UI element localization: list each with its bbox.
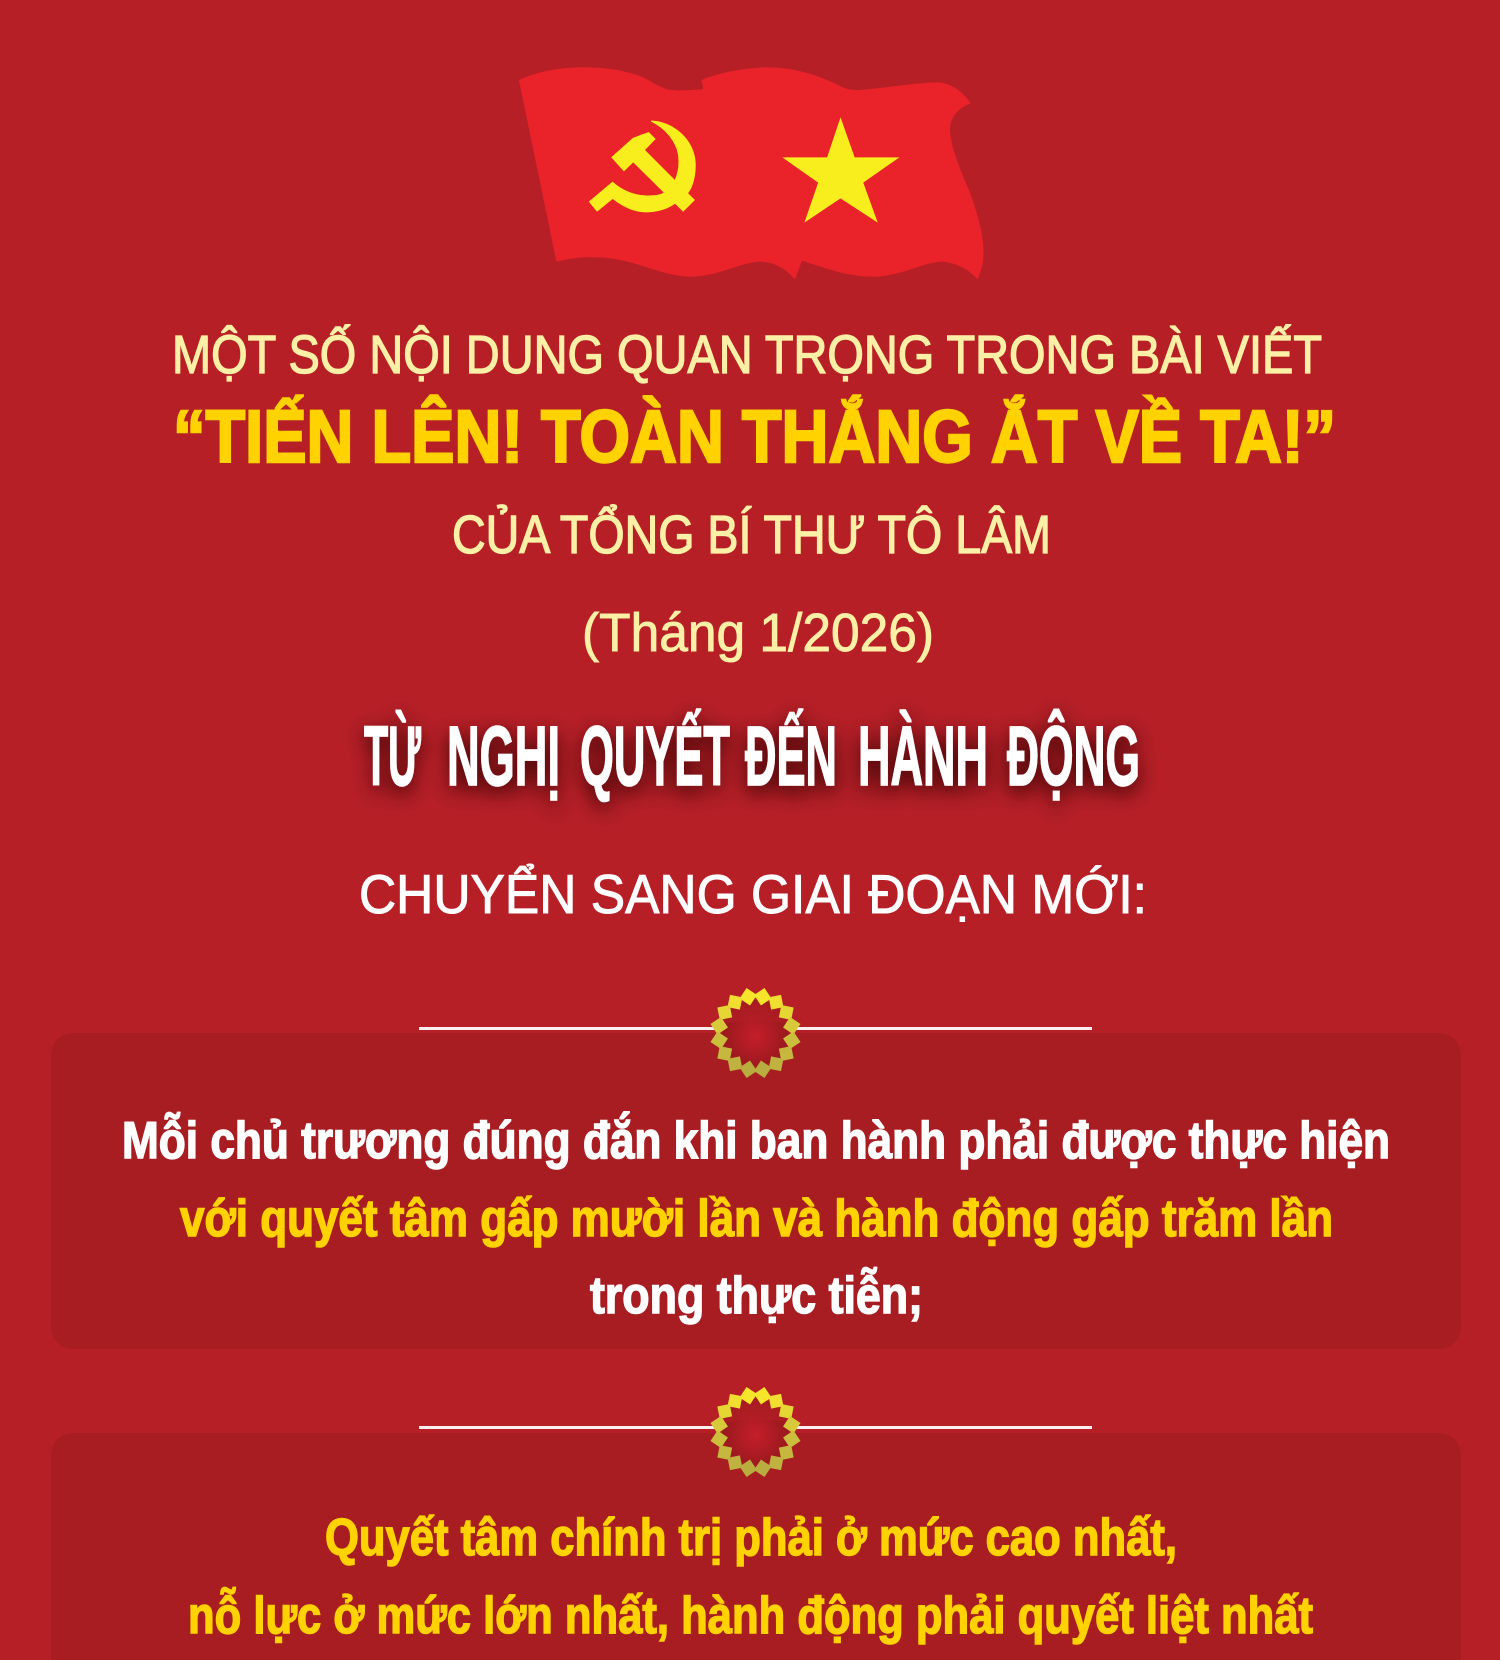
- panel 2 first line: Quyết tâm chính trị phải ở mức cao nhất,: [325, 1509, 1177, 1567]
- main heading: NGHỊ: [447, 709, 560, 803]
- divider 2: [419, 1387, 1092, 1477]
- title line 3: CỦA TỔNG BÍ THƯ TÔ LÂM: [452, 505, 1051, 565]
- title line 1: MỘT SỐ NỘI DUNG QUAN TRỌNG TRONG BÀI VIẾT: [172, 325, 1322, 385]
- star: [782, 117, 899, 223]
- panel 1: [51, 1033, 1461, 1349]
- panel 2: [51, 1433, 1461, 1660]
- main heading: ĐẾN: [745, 709, 837, 803]
- subheading: CHUYỂN SANG GIAI ĐOẠN MỚI:: [359, 863, 1147, 925]
- medallion icon 1: [710, 988, 801, 1078]
- date: (Tháng 1/2026): [582, 603, 934, 663]
- main heading: QUYẾT: [580, 709, 730, 803]
- panel 2 background: [51, 1433, 1461, 1660]
- panel 1 closing line: trong thực tiễn;: [590, 1267, 923, 1325]
- medallion icon 2: [710, 1387, 801, 1477]
- main heading: ĐỘNG: [1007, 709, 1140, 803]
- sickle: [590, 121, 695, 212]
- hammer: [612, 133, 694, 211]
- icon: party flag: [519, 67, 984, 279]
- flag cloth: [519, 67, 984, 279]
- divider 1: [419, 988, 1092, 1078]
- main heading: [364, 709, 1140, 803]
- main heading: TỪ: [364, 709, 421, 803]
- panel 2 second line: nỗ lực ở mức lớn nhất, hành động phải quyết liệt nhất: [188, 1587, 1313, 1645]
- panel 1 background: [51, 1033, 1461, 1349]
- title line 2: “TIẾN LÊN! TOÀN THẮNG ẮT VỀ TA!”: [173, 395, 1336, 478]
- main heading: HÀNH: [858, 709, 988, 803]
